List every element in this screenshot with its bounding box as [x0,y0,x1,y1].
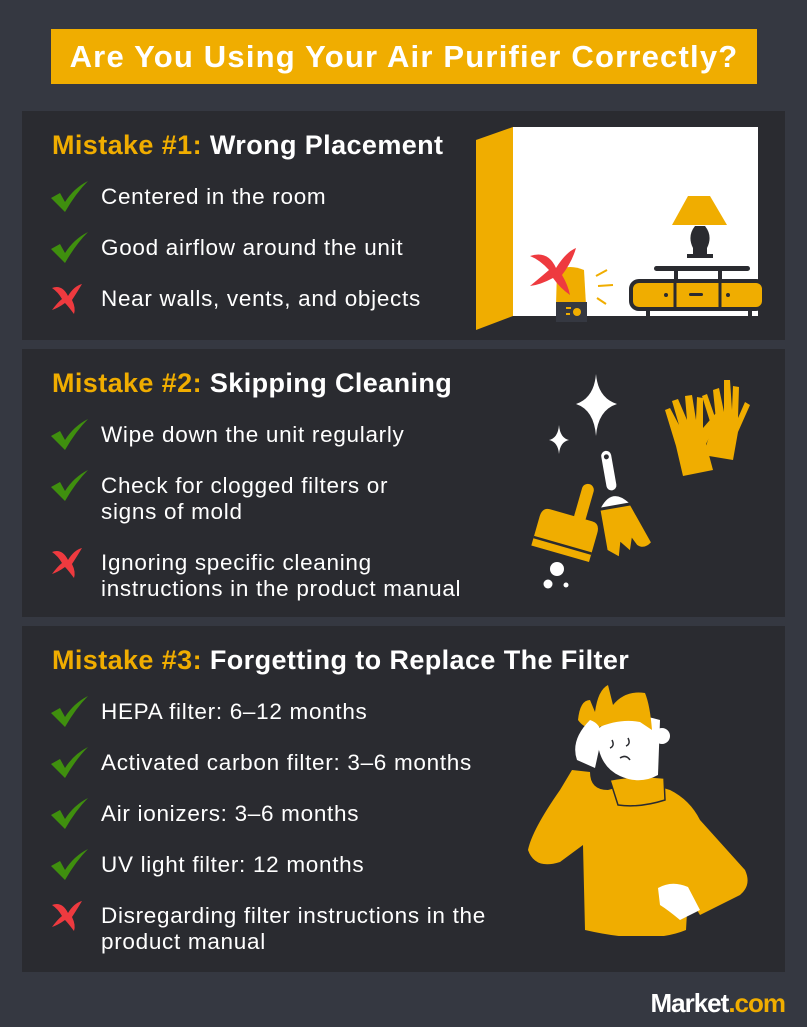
item: ignoring: Ignoring specific cleaning [101,550,372,575]
item: HEPA [51,696,368,727]
item: centered: Centered in the room [101,184,326,209]
item: disregarding [52,901,486,954]
item: disregarding: Disregarding filter instructions in the [101,903,486,928]
heading 1: Mistake #1: Wrong Placement [52,130,443,160]
item: airflow [51,232,403,263]
illustration: cleaning tools [531,374,750,588]
title [51,29,757,84]
item: disregarding: product manual [101,929,266,954]
item: carbon: Activated carbon filter: 3–6 months [101,750,472,775]
item: ionizers [51,798,359,829]
item: HEPA: HEPA filter: 6–12 months [101,699,368,724]
title: Are You Using Your Air Purifier Correctly? [70,39,738,74]
panel: mistake 1 [22,111,785,340]
logo: Market.com [650,988,785,1018]
item: ignoring: instructions in the product manual [101,576,461,601]
item: clogged: signs of mold [101,499,243,524]
item: ionizers: Air ionizers: 3–6 months [101,801,359,826]
heading 3: Mistake #3: Forgetting to Replace The Filter [52,645,629,675]
item: UV: UV light filter: 12 months [101,852,364,877]
illustration: confused person [528,685,748,936]
panel: mistake 3 [22,626,785,972]
heading 2: Mistake #2: Skipping Cleaning [52,368,452,398]
item: centered [51,181,326,212]
illustration: room [476,127,762,330]
item: clogged: Check for clogged filters or [101,473,388,498]
item: ignoring [52,548,461,601]
item: airflow: Good airflow around the unit [101,235,403,260]
item: wipe: Wipe down the unit regularly [101,422,404,447]
panel: mistake 2 [22,349,785,617]
item: wipe [51,419,404,450]
item: near walls: Near walls, vents, and objects [101,286,421,311]
item: clogged [51,470,388,524]
item: UV [51,849,364,880]
